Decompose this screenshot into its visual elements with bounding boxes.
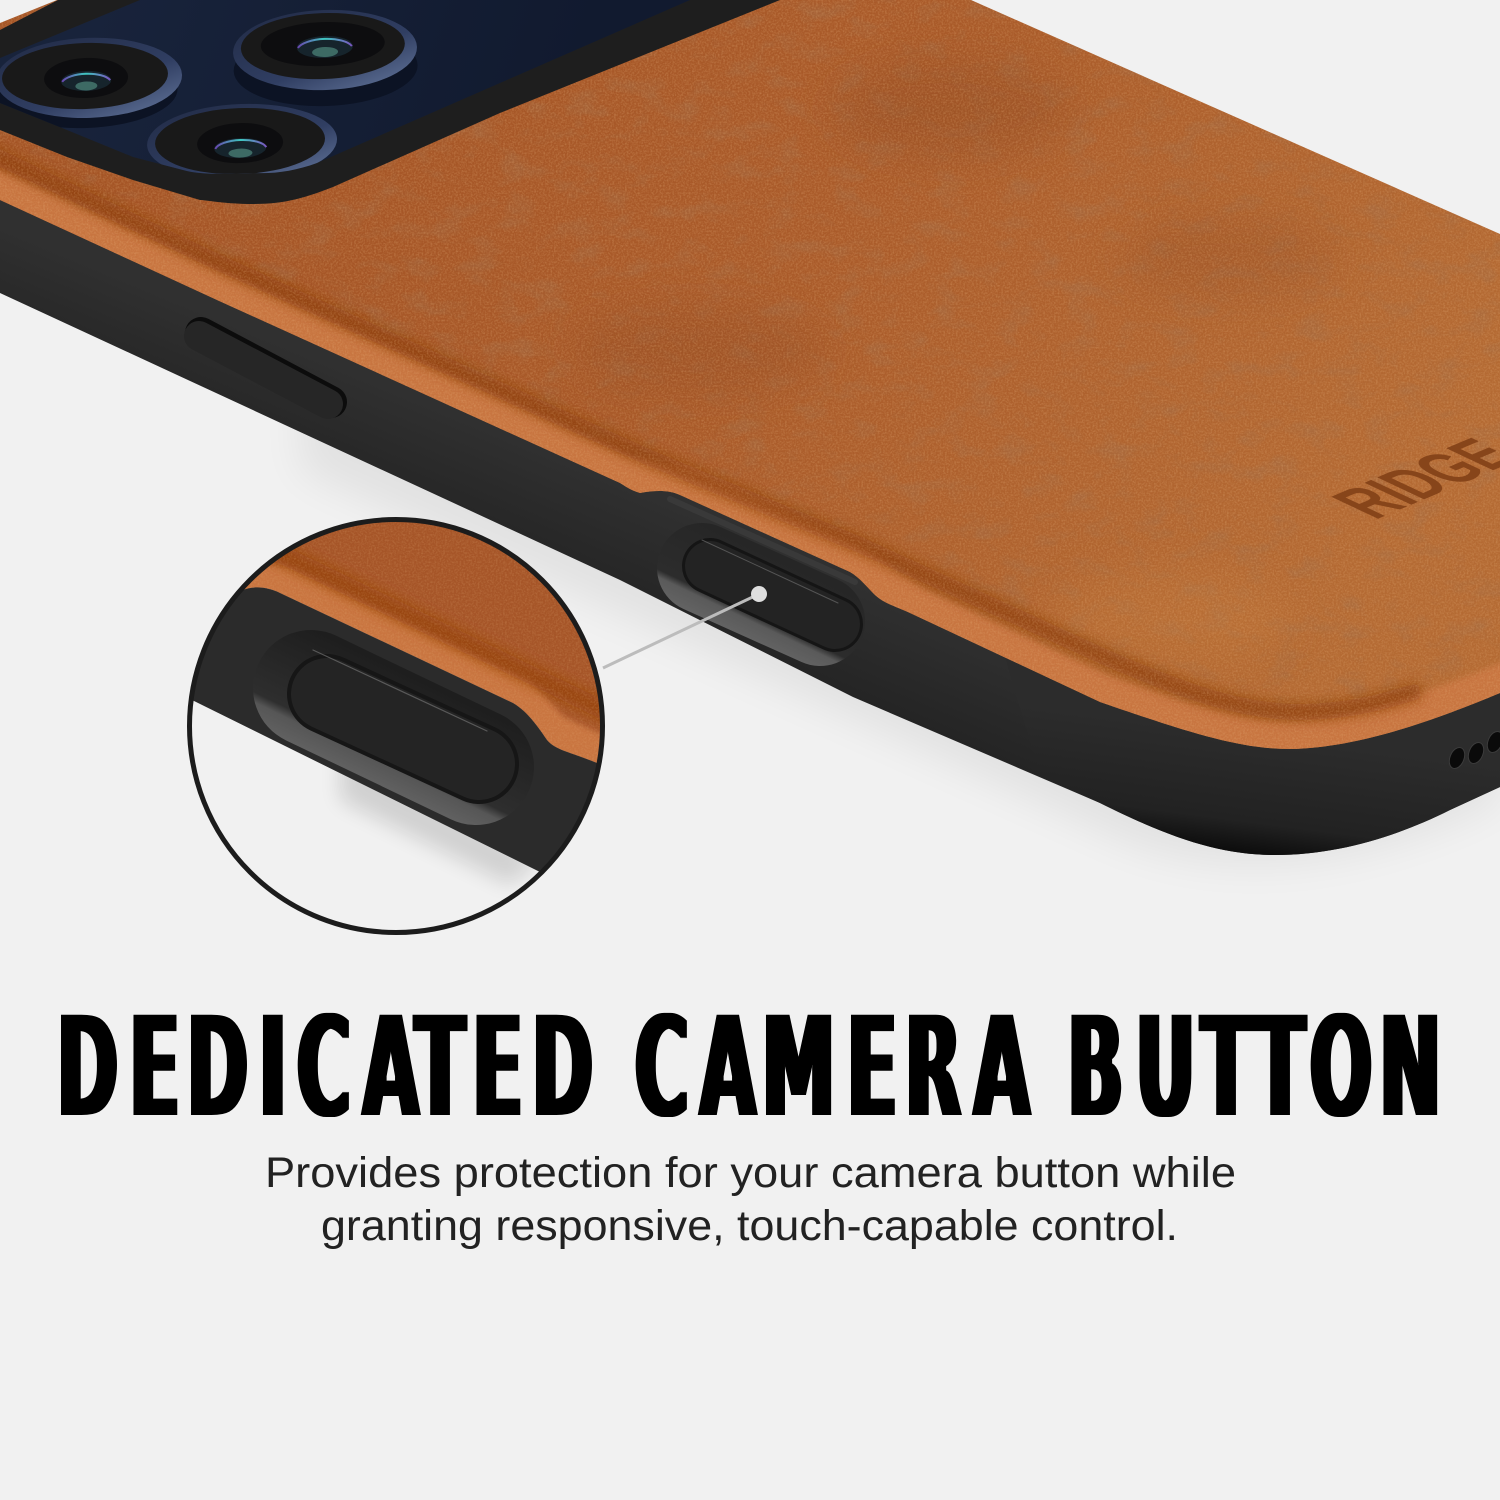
lens bottom [147, 104, 337, 174]
subtitle: granting responsive, touch-capable control. [321, 1202, 1178, 1250]
inset shadow [334, 770, 534, 887]
lens left [0, 35, 184, 131]
inset case wall [194, 587, 597, 872]
inset button [313, 650, 487, 764]
subtitle [265, 1149, 1236, 1250]
callout dot [751, 586, 767, 602]
black case side wall [0, 150, 1500, 855]
inset ring [190, 520, 602, 932]
camera module [0, 0, 780, 204]
subtitle: Provides protection for your camera button while [265, 1149, 1236, 1197]
lens top [232, 7, 419, 109]
inset recess [311, 650, 487, 767]
phone drop shadow [300, 380, 1500, 864]
title: DEDICATED CAMERA BUTTON [57, 985, 1441, 1151]
camera bezel [0, 0, 780, 204]
camera button [702, 540, 838, 624]
callout leader line [603, 594, 759, 668]
inset leather [244, 522, 600, 763]
side button [199, 333, 331, 404]
zoom inset circle [187, 517, 605, 935]
leather back panel [0, 0, 1500, 760]
lenses [0, 7, 419, 183]
phone case [0, 0, 1500, 864]
speaker holes [1446, 729, 1500, 771]
camera button recess [670, 499, 855, 624]
camera plate [0, 0, 690, 174]
